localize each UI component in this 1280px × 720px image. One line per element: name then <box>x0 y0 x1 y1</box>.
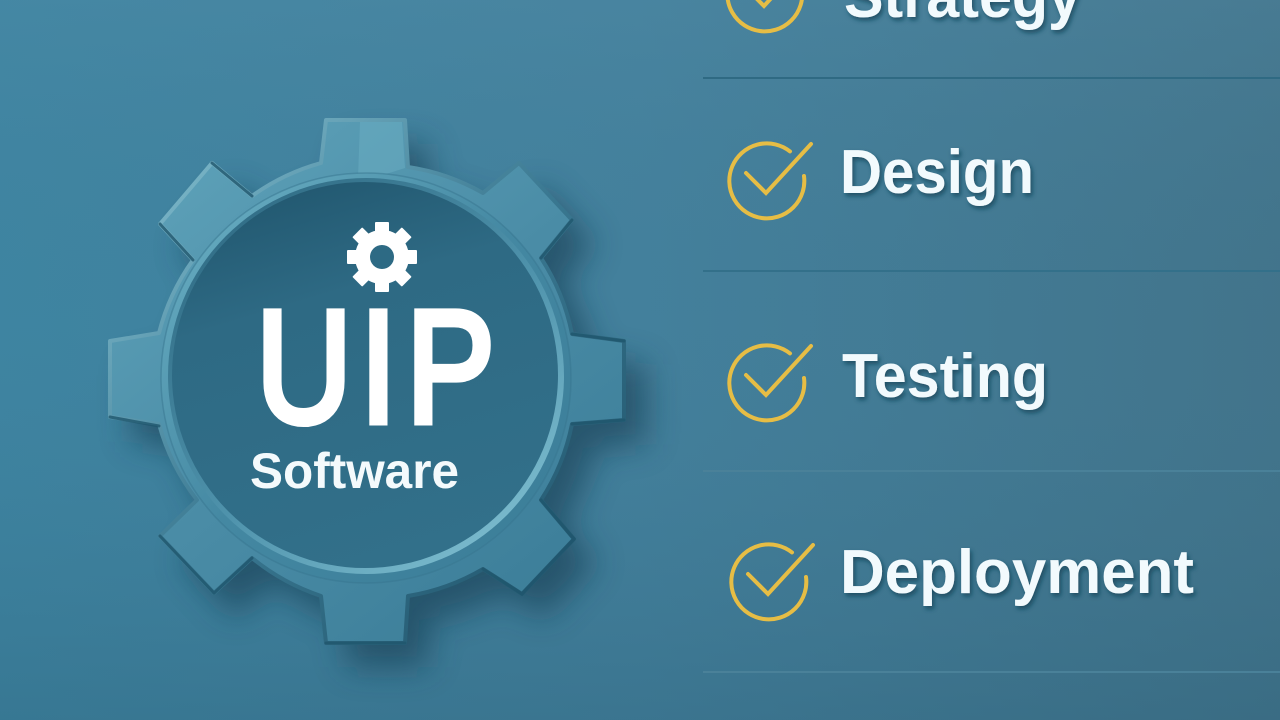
label: Design <box>840 138 1034 207</box>
inner disc <box>172 182 558 568</box>
list item: Testing <box>729 342 1048 420</box>
icon: check circle <box>729 143 811 218</box>
gear body <box>110 120 624 643</box>
divider lines <box>703 77 1280 673</box>
UIP wordmark: U <box>256 278 352 457</box>
Software label: Software <box>250 443 459 499</box>
tooth highlight <box>358 122 405 178</box>
list item: Design <box>729 138 1034 218</box>
label: Deployment <box>840 538 1194 607</box>
UIP wordmark: I <box>360 278 397 457</box>
list item: Deployment <box>731 538 1194 619</box>
gear shadow <box>132 144 646 667</box>
UIP wordmark: P <box>406 278 495 457</box>
icon: check circle <box>729 345 811 420</box>
gear ring lip <box>168 178 564 574</box>
small gear icon <box>347 222 417 292</box>
icon: check circle <box>727 0 809 31</box>
gear ring band <box>161 173 571 583</box>
list item: Strategy <box>727 0 1081 31</box>
gear emblem <box>110 120 624 643</box>
label: Testing <box>842 342 1048 411</box>
icon: check circle <box>731 544 813 619</box>
tooth groove lines <box>110 163 624 643</box>
